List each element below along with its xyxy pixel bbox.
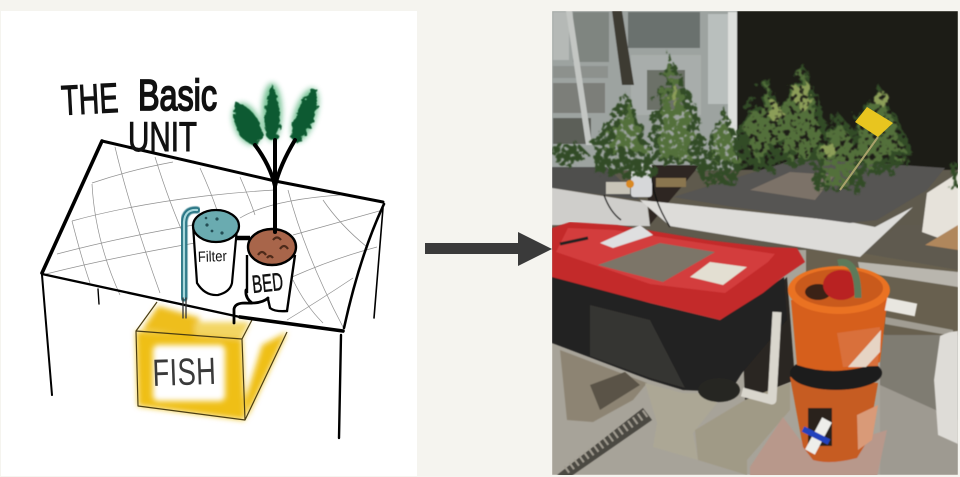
arrow head <box>518 232 552 266</box>
lower bucket window <box>808 408 832 446</box>
grow bed pot <box>247 229 296 312</box>
bucket logo <box>837 327 881 367</box>
floor <box>552 249 880 475</box>
drain pipe <box>234 290 268 323</box>
lower bucket <box>790 377 878 462</box>
drain valve <box>698 382 741 403</box>
white outlet pipe <box>886 304 916 310</box>
right white container <box>922 173 958 245</box>
lid left white patch <box>600 225 653 248</box>
label: FISH: FISH <box>152 351 217 395</box>
siphon pipe <box>183 210 197 318</box>
water bubbles <box>205 217 224 235</box>
lid grey panel <box>598 243 715 282</box>
stacked orange buckets <box>788 262 916 462</box>
plant stems <box>255 140 295 232</box>
sketch paper <box>1 11 417 476</box>
ball valve <box>810 420 827 452</box>
greenhouse windows <box>553 11 737 145</box>
fish tank <box>136 302 287 420</box>
plant leaves <box>234 84 318 147</box>
table grid <box>46 147 383 327</box>
fish tank body <box>552 275 787 392</box>
main planter plastic cover <box>673 158 945 223</box>
yellow sticky card <box>840 107 893 190</box>
table outline <box>42 141 384 438</box>
pot outline <box>247 255 295 311</box>
greenhouse wall <box>552 11 738 181</box>
main planter side <box>640 200 913 257</box>
lid shape <box>552 222 805 320</box>
black gasket <box>790 356 882 390</box>
bucket interior <box>795 269 883 307</box>
gap between planters <box>645 165 700 225</box>
lid upper plate <box>556 228 775 293</box>
upper bucket body <box>791 296 888 371</box>
white pvc pipe <box>742 312 777 400</box>
mid-ground dark base <box>552 170 958 260</box>
red tank lid <box>552 222 805 320</box>
tank yellow fill <box>136 306 287 420</box>
plant leaf glow <box>227 83 324 149</box>
label: BED: BED <box>251 268 284 299</box>
pot soil <box>248 229 296 265</box>
arrow <box>425 232 552 266</box>
black cooling pad wall <box>737 11 958 176</box>
lower floor rail <box>885 317 953 336</box>
left planter cover <box>552 167 640 200</box>
lid slot <box>560 238 588 244</box>
label: Filter: Filter <box>198 248 227 266</box>
green hose <box>838 262 858 298</box>
plants <box>552 55 958 190</box>
lower bucket logo <box>857 405 878 450</box>
inner red bucket <box>823 270 859 300</box>
bench shelf mesh <box>866 250 957 269</box>
white bucket at edge <box>934 331 958 444</box>
upper bucket rim <box>788 266 890 314</box>
title line: THE: THE <box>60 74 119 124</box>
pot fill <box>247 255 295 312</box>
panel: photo-style illustration of the real unit <box>552 11 958 477</box>
title line: UNIT: UNIT <box>128 113 197 160</box>
card <box>855 107 893 137</box>
floor drain <box>557 408 652 477</box>
tank outline <box>136 302 287 420</box>
under-bench dark zone <box>806 250 958 335</box>
cinder blocks <box>560 350 887 477</box>
connector pipe <box>237 236 250 240</box>
planter gear and sensors <box>604 164 686 227</box>
card stick <box>840 137 878 190</box>
arrow shaft <box>425 243 519 254</box>
left planter side <box>552 188 650 226</box>
floor right shade <box>880 334 958 419</box>
bucket water <box>193 210 239 242</box>
dark area behind pipe <box>742 277 795 400</box>
panel: hand-drawn sketch of the basic unit <box>1 11 417 476</box>
lid right white patch <box>690 262 747 285</box>
tank white centre <box>153 345 225 401</box>
title: The Basic Unit <box>60 71 217 160</box>
bucket body <box>193 225 237 295</box>
bench shelf rail <box>858 262 958 287</box>
soil pebbles <box>258 238 288 258</box>
filter bucket <box>193 210 239 295</box>
title line: Basic: Basic <box>138 71 217 120</box>
plant <box>227 83 324 232</box>
